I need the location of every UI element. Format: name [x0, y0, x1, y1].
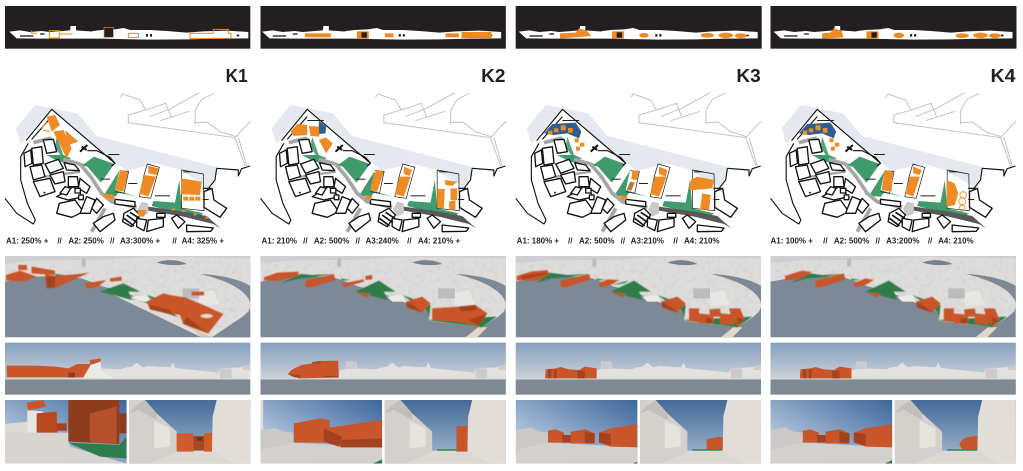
skyline strip K3: [516, 6, 762, 49]
street view right K2: [385, 400, 506, 464]
site plan K2: [260, 93, 506, 232]
skyline strip K2: [260, 6, 506, 49]
density labels K2: A1: 210%: [261, 236, 297, 245]
street view right K4: [895, 400, 1016, 464]
density labels K3: //: [673, 236, 679, 245]
street view right K3: [640, 400, 761, 464]
aerial view K2: [260, 256, 506, 337]
density labels K3: A3:210%: [631, 236, 664, 245]
street view left K3: [516, 400, 638, 464]
density labels K3: //: [568, 236, 573, 245]
density labels K1: A2: 250%: [68, 236, 104, 245]
density labels K1: A4: 325% +: [182, 236, 224, 245]
waterfront elevation K3: [516, 343, 761, 395]
street view right K1: [129, 400, 250, 464]
waterfront elevation K2: [260, 343, 506, 395]
site plan K4: [770, 93, 1016, 232]
aerial view K1: [5, 256, 250, 337]
heading K1: K1: [226, 65, 248, 86]
density labels K4: //: [928, 236, 933, 245]
density labels K4: //: [823, 236, 828, 245]
heading K4: K4: [990, 65, 1016, 86]
density labels K4: A4: 210%: [938, 236, 974, 245]
density labels K2: A2: 500%: [314, 236, 349, 245]
density labels K2: //: [407, 236, 412, 245]
column: K3: [516, 6, 762, 245]
density labels K4: A2: 500%: [834, 236, 869, 245]
density labels K1: //: [110, 236, 115, 245]
density labels K3: A2: 500%: [579, 236, 615, 245]
renders K2: [260, 256, 506, 464]
density labels K4: A1: 100% +: [770, 236, 813, 245]
street view left K4: [770, 400, 893, 464]
renders K4: [770, 256, 1016, 464]
density labels K3: //: [621, 236, 626, 245]
density labels K3: A1: 180% +: [517, 236, 559, 245]
waterfront elevation K1: [5, 343, 250, 395]
aerial view K4: [770, 256, 1016, 337]
renders K3: [516, 256, 761, 464]
density labels K3: A4: 210%: [684, 236, 720, 245]
density labels K2: A3:240%: [365, 236, 399, 245]
density labels K1: A3:300% +: [120, 236, 161, 245]
site plan K1: [5, 93, 251, 232]
density labels K1: A1: 250% +: [6, 236, 49, 245]
column: K1: [5, 6, 251, 245]
street view left K2: [260, 400, 382, 464]
density labels K2: //: [303, 236, 308, 245]
site plan K3: [516, 93, 761, 232]
aerial view K3: [516, 256, 761, 337]
waterfront elevation K4: [770, 343, 1016, 395]
street view left K1: [5, 400, 127, 464]
skyline strip K4: [770, 6, 1016, 49]
density labels K1: //: [57, 236, 63, 245]
density labels K1: //: [172, 236, 178, 245]
column: K2: [260, 6, 506, 245]
renders K1: [5, 256, 250, 464]
heading K3: K3: [736, 65, 761, 86]
density labels K4: A3:200%: [886, 236, 919, 245]
density labels K2: //: [355, 236, 361, 245]
density labels K4: //: [875, 236, 881, 245]
density labels K2: A4: 210% +: [418, 236, 461, 245]
column: K4: [770, 6, 1016, 245]
skyline strip K1: [5, 6, 250, 49]
heading K2: K2: [481, 65, 505, 86]
